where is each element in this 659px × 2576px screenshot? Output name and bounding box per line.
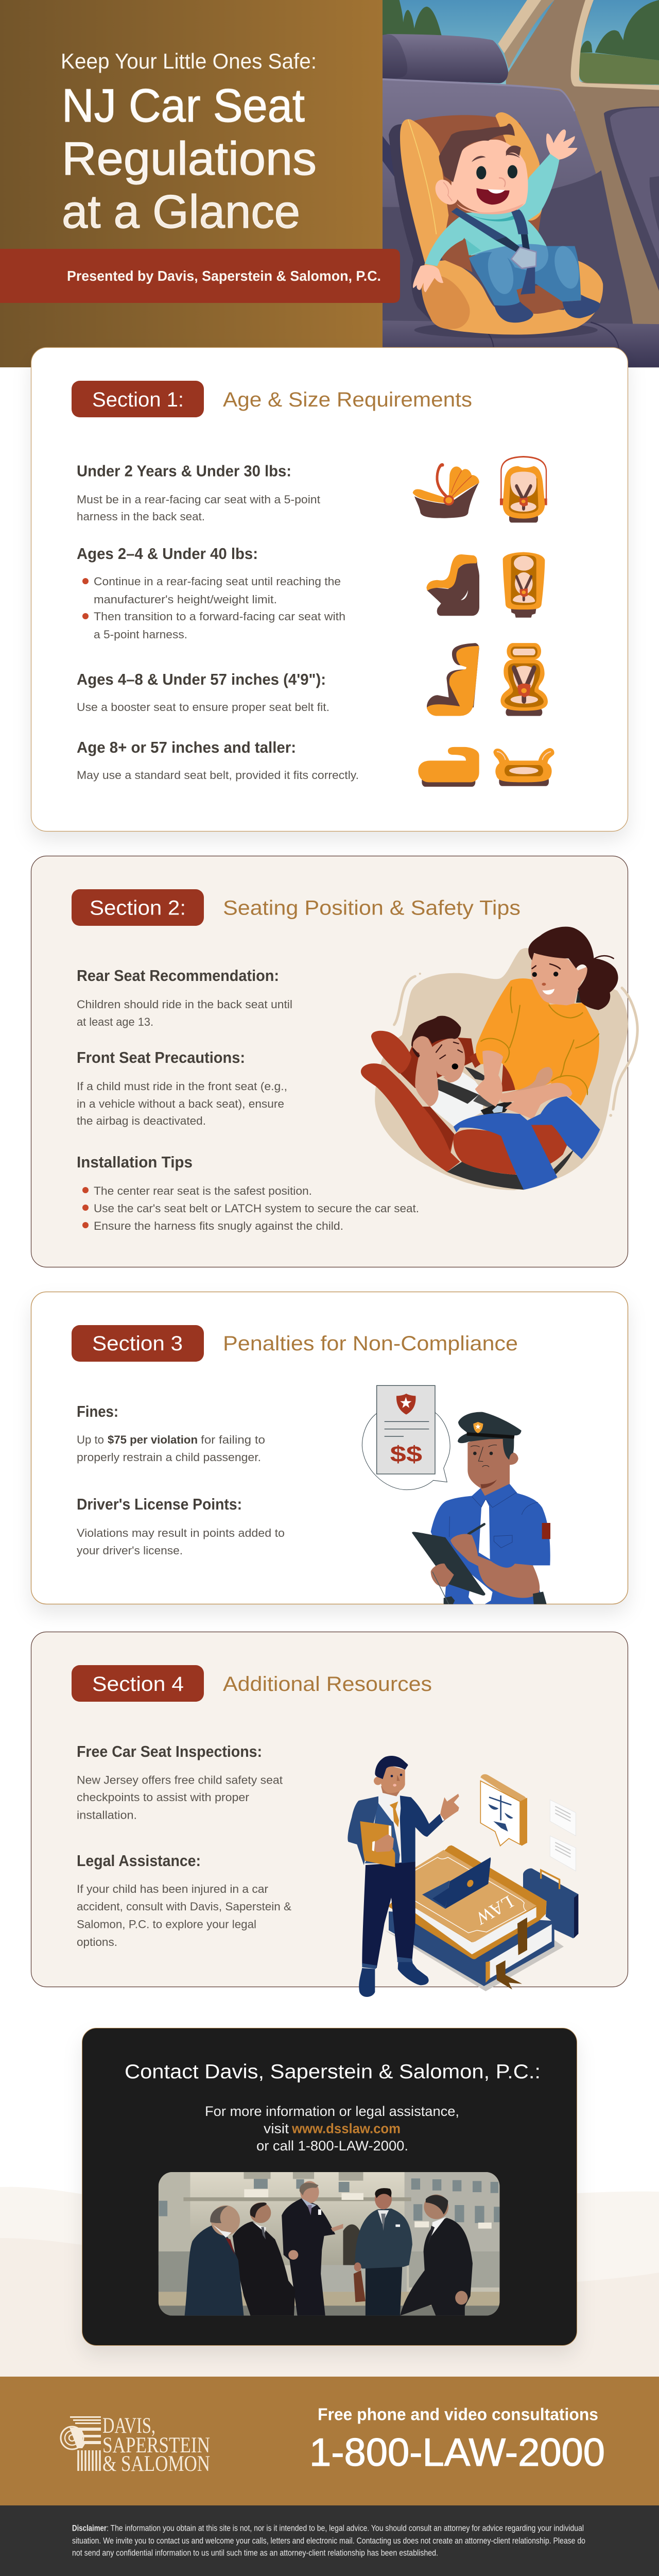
installation tips block: Ensure the harness fits snugly against the child. <box>94 1219 343 1232</box>
contact details: visit <box>264 2121 289 2136</box>
rear seat block: Children should ride in the back seat until <box>77 998 292 1011</box>
section 1 badge <box>72 381 204 417</box>
contact details: For more information or legal assistance, <box>205 2104 459 2119</box>
license points block <box>77 1495 285 1557</box>
briefcase <box>523 1868 578 1938</box>
license points block: Violations may result in points added to <box>77 1527 285 1539</box>
icon: high-back booster front <box>500 643 548 716</box>
section 3 badge: Section 3 <box>92 1332 183 1355</box>
icon: convertible seat front <box>503 552 545 618</box>
icon: infant carrier side <box>413 465 479 518</box>
legal assistance block: If your child has been injured in a car <box>77 1883 268 1895</box>
logo wordmark: & SALOMON <box>102 2452 210 2476</box>
contact card background <box>82 2028 577 2345</box>
red presenter band <box>0 249 400 303</box>
logo column <box>61 2416 101 2471</box>
panel: section 4 additional resources <box>31 1632 628 1997</box>
hero banner <box>0 0 659 367</box>
small documents <box>550 1800 576 1871</box>
main title: NJ Car Seat <box>62 80 305 132</box>
laptop <box>422 1857 491 1909</box>
illustration: police officer and ticket <box>362 1385 550 1604</box>
under 2 years block: Under 2 Years & Under 30 lbs: <box>77 462 291 480</box>
contact details: or call 1-800-LAW-2000. <box>256 2138 408 2154</box>
ages 2-4 block: manufacturer's height/weight limit. <box>94 593 277 606</box>
age 8+ block: Age 8+ or 57 inches and taller: <box>77 738 296 756</box>
lawyer figure <box>348 1756 459 1997</box>
section 4 heading: Additional Resources <box>223 1673 432 1696</box>
front seat block: If a child must ride in the front seat (e.g., <box>77 1080 287 1093</box>
main title <box>62 80 317 238</box>
rear seat block <box>77 967 292 1028</box>
section 3 badge <box>72 1325 204 1362</box>
rear seat block: Rear Seat Recommendation: <box>77 967 279 985</box>
inspections block <box>77 1742 283 1822</box>
disclaimer text: Disclaimer <box>72 2523 107 2533</box>
officer <box>412 1412 550 1604</box>
ages 2-4 block: Continue in a rear-facing seat until reaching the <box>94 575 341 588</box>
ages 2-4 block: Ages 2–4 & Under 40 lbs: <box>77 545 258 563</box>
legal assistance block <box>77 1852 291 1948</box>
front seat block: in a vehicle without a back seat), ensure <box>77 1097 284 1110</box>
age 8+ block: May use a standard seat belt, provided it fits correctly. <box>77 769 359 782</box>
fines block: for failing to <box>201 1433 265 1446</box>
logo: Davis Saperstein & Salomon <box>61 2414 210 2476</box>
icons: car seats <box>413 456 554 787</box>
illustration: lawyer with law books <box>348 1756 578 1997</box>
ages 2-4 block: Then transition to a forward-facing car seat with <box>94 610 345 623</box>
under 2 years block: harness in the back seat. <box>77 510 205 523</box>
icon: backless booster front <box>493 748 554 786</box>
law books: LAW <box>473 1891 517 1929</box>
ages 2-4 block <box>77 545 345 641</box>
icon: infant carrier front <box>500 456 547 522</box>
speech bubble with ticket <box>362 1385 450 1490</box>
card 4 background <box>31 1632 628 1987</box>
main title: Regulations <box>62 133 317 185</box>
icon: convertible seat side <box>426 554 479 616</box>
page background waves <box>0 2187 659 2377</box>
disclaimer bar <box>0 2505 659 2576</box>
ages 4-8 block: Use a booster seat to ensure proper seat belt fit. <box>77 701 330 714</box>
legal assistance block: Legal Assistance: <box>77 1852 201 1870</box>
illustration: child in car seat <box>383 0 659 367</box>
age 8+ block <box>77 738 359 782</box>
inspections block: installation. <box>77 1808 137 1822</box>
panel: section 3 penalties <box>31 1292 628 1604</box>
illustration: mother buckling child <box>361 927 637 1190</box>
consultation line: Free phone and video consultations <box>318 2405 598 2424</box>
ages 2-4 block: a 5-point harness. <box>94 628 187 641</box>
photo: attorneys in front of courthouse <box>159 2172 499 2316</box>
inspections block: New Jersey offers free child safety seat <box>77 1773 283 1787</box>
under 2 years block <box>77 462 320 523</box>
fines block: $75 per violation <box>108 1433 198 1446</box>
front seat block: Front Seat Precautions: <box>77 1048 245 1066</box>
section 3 heading: Penalties for Non-Compliance <box>223 1332 518 1355</box>
license points block: your driver's license. <box>77 1544 183 1557</box>
logo wordmark <box>102 2414 210 2476</box>
contact heading: Contact Davis, Saperstein & Salomon, P.C.: <box>125 2061 541 2083</box>
panel: section 1 age and size <box>31 347 628 832</box>
hero brown panel <box>0 0 383 367</box>
fines block: properly restrain a child passenger. <box>77 1451 261 1464</box>
license points block: Driver's License Points: <box>77 1495 242 1513</box>
ages 4-8 block: Ages 4–8 & Under 57 inches (4'9"): <box>77 670 326 688</box>
footer call-to-action bar <box>0 2377 659 2505</box>
fines block <box>77 1402 265 1464</box>
phone number: 1-800-LAW-2000 <box>309 2431 605 2475</box>
icon: backless booster side <box>418 747 479 787</box>
installation tips block: The center rear seat is the safest position. <box>94 1184 312 1197</box>
logo wordmark: DAVIS, <box>102 2414 155 2438</box>
disclaimer text: not send any confidential information to us until such time as an attorney-client relationship has been established. <box>72 2548 438 2557</box>
installation tips block <box>77 1153 419 1232</box>
card 2 background <box>31 856 628 1267</box>
legal assistance block: options. <box>77 1936 117 1948</box>
contact details: www.dsslaw.com <box>291 2121 401 2136</box>
inspections block: Free Car Seat Inspections: <box>77 1742 262 1760</box>
front seat block <box>77 1048 287 1127</box>
inspections block: checkpoints to assist with proper <box>77 1791 249 1804</box>
panel: contact card <box>82 2028 577 2345</box>
icon: high-back booster side <box>427 643 479 716</box>
card 3 background <box>31 1292 628 1604</box>
fines block: Up to <box>77 1433 104 1446</box>
card 1 background <box>31 347 628 832</box>
main title: at a Glance <box>62 186 300 238</box>
eyebrow heading: Keep Your Little Ones Safe: <box>61 49 317 73</box>
installation tips block: Installation Tips <box>77 1153 193 1171</box>
legal assistance block: Salomon, P.C. to explore your legal <box>77 1918 256 1931</box>
speech bubble with scales <box>480 1774 527 1846</box>
installation tips block: Use the car's seat belt or LATCH system to secure the car seat. <box>94 1202 419 1215</box>
legal assistance block: accident, consult with Davis, Saperstein & <box>77 1900 291 1913</box>
panel: section 2 seating position <box>31 856 637 1267</box>
section 2 badge: Section 2: <box>90 896 186 919</box>
under 2 years block: Must be in a rear-facing car seat with a 5-point <box>77 493 320 506</box>
section 2 badge <box>72 889 204 926</box>
speech bubble with ticket: $$ <box>390 1442 422 1467</box>
section 4 badge: Section 4 <box>92 1673 184 1696</box>
presenter line: Presented by Davis, Saperstein & Salomon, P.C. <box>67 268 381 284</box>
front seat block: the airbag is deactivated. <box>77 1114 206 1127</box>
fines block: Fines: <box>77 1402 118 1420</box>
rear seat block: at least age 13. <box>77 1015 153 1028</box>
disclaimer text <box>72 2523 585 2557</box>
ages 4-8 block <box>77 670 330 714</box>
section 1 heading: Age & Size Requirements <box>223 388 472 411</box>
contact details <box>205 2104 459 2154</box>
section 4 badge <box>72 1665 204 1702</box>
section 1 badge: Section 1: <box>92 388 184 411</box>
section 2 heading: Seating Position & Safety Tips <box>223 896 521 919</box>
law books <box>385 1845 564 1991</box>
logo wordmark: SAPERSTEIN <box>102 2433 210 2458</box>
